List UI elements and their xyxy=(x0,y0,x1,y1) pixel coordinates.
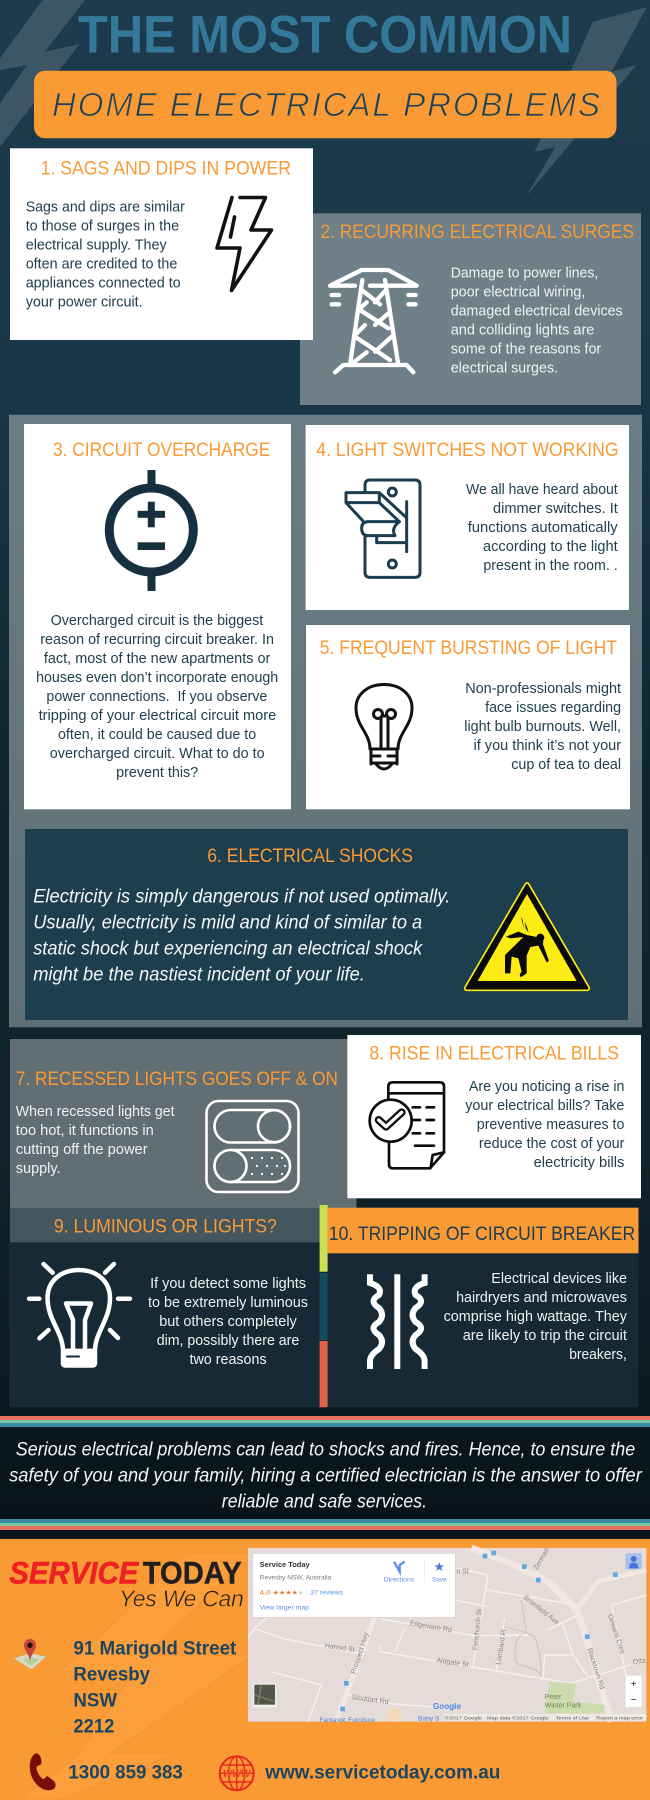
map labels: Blacktown Rd xyxy=(585,1647,605,1690)
text: overcharge description: houses even don’t incorporate enough xyxy=(36,669,278,686)
text: bills description: preventive measures to xyxy=(477,1116,624,1133)
text: switches description: according to the light xyxy=(483,538,619,555)
website: www.servicetoday.com.au xyxy=(264,1762,500,1783)
map labels: Aldgate St xyxy=(436,1657,469,1669)
text: bills description xyxy=(465,1078,624,1171)
text: overcharge description: Overcharged circuit is the biggest xyxy=(51,612,264,629)
text: bursting description: cup of tea to deal xyxy=(511,756,621,773)
map labels: Zermatt xyxy=(533,1547,551,1571)
heading 9: 9. LUMINOUS OR LIGHTS? xyxy=(54,1216,277,1238)
icon: checked bill xyxy=(370,1082,444,1168)
map embed xyxy=(248,1547,646,1724)
text: switches description: present in the room. . xyxy=(483,557,618,574)
map labels: Harrod St xyxy=(324,1643,355,1654)
text: surges description: damaged electrical devices xyxy=(451,302,623,319)
icon: lightning bolt xyxy=(217,198,272,290)
heading 5: 5. FREQUENT BURSTING OF LIGHT xyxy=(320,637,617,659)
text: luminous description: but others completely xyxy=(159,1313,297,1330)
background lightning bolts xyxy=(0,0,647,196)
map labels: Lombard Pl xyxy=(495,1629,508,1665)
text: overcharge description: power connections. If you observe xyxy=(46,688,267,705)
panel: 4 light switches xyxy=(306,425,629,610)
panel: 9 and 10 dark area xyxy=(9,1208,638,1407)
text: tripping description: comprise high wattage. They xyxy=(444,1308,627,1325)
text: sags description: to those of surges in the xyxy=(26,217,179,234)
map info card: Revesby NSW, Australia xyxy=(260,1575,332,1582)
text: surges description: poor electrical wiring, xyxy=(451,283,585,300)
map info card: Save xyxy=(432,1576,447,1583)
map attribution: Report a map error xyxy=(596,1715,643,1721)
icon: glowing bulb xyxy=(29,1264,130,1366)
map labels: Stoddart Rd xyxy=(351,1694,389,1706)
icon: transformer coils xyxy=(370,1274,425,1369)
icon: www globe: WWW xyxy=(223,1768,252,1780)
text: overcharge description: often, it could be caused due to xyxy=(58,726,256,743)
text: sags description: Sags and dips are similar xyxy=(26,198,185,215)
map labels: Edgeware Rd xyxy=(409,1620,452,1634)
text: overcharge description: reason of recurring circuit breaker. In xyxy=(40,631,274,648)
zoom control xyxy=(626,1676,642,1707)
text: recessed description: supply. xyxy=(16,1160,61,1177)
text: switches description: dimmer switches. It xyxy=(493,500,619,517)
map info card: ★ xyxy=(298,1589,303,1596)
panel: 7 recessed lights xyxy=(10,1039,356,1208)
text: bursting description: if you think it’s not your xyxy=(474,737,621,754)
map labels: n St xyxy=(456,1568,469,1575)
map attribution: ©2017 Google - Map data ©2017 Google xyxy=(445,1714,549,1721)
map info card xyxy=(253,1553,455,1617)
map info card: ★ xyxy=(434,1560,445,1574)
heading 3: 3. CIRCUIT OVERCHARGE xyxy=(53,439,270,461)
text: luminous description: If you detect some lights xyxy=(150,1275,306,1292)
address xyxy=(73,1638,237,1737)
text: sags description: appliances connected to xyxy=(26,274,181,291)
address: 2212 xyxy=(73,1716,114,1737)
text: tripping description xyxy=(444,1270,628,1363)
map info card: ★★★★ xyxy=(273,1589,298,1596)
text: overcharge description: fact, most of the new apartments or xyxy=(44,650,270,667)
conclusion band xyxy=(0,1416,650,1530)
text: conclusion xyxy=(9,1439,643,1513)
text: luminous description: dim, possibly there are xyxy=(157,1332,299,1349)
text: bills description: electricity bills xyxy=(534,1154,624,1171)
map labels: Peter xyxy=(545,1694,562,1701)
text: shocks description: might be the nastiest incident of your life. xyxy=(33,964,365,986)
panel: 5 bursting of light xyxy=(306,625,630,809)
map park xyxy=(545,1682,605,1713)
text: recessed description: too hot, it functions in xyxy=(16,1122,154,1139)
text: overcharge description xyxy=(36,612,278,781)
text: switches description xyxy=(466,481,619,574)
text: shocks description: Electricity is simply dangerous if not used optimally. xyxy=(33,886,450,908)
icon: transmission tower xyxy=(330,270,417,372)
panel: footer contact xyxy=(0,1539,650,1800)
phone number: 1300 859 383 xyxy=(68,1762,183,1783)
icon: toggle switches xyxy=(206,1101,298,1192)
icon: www globe xyxy=(220,1756,254,1790)
panel: 3 circuit overcharge xyxy=(24,424,291,809)
text: tripping description: breakers, xyxy=(569,1346,627,1363)
address: 91 Marigold Street xyxy=(73,1638,237,1659)
map info card: Directions xyxy=(384,1576,414,1583)
address: Revesby xyxy=(73,1664,150,1685)
text: recessed description xyxy=(16,1103,175,1177)
panel: grey group 3 to 6 xyxy=(9,415,642,1027)
icon: electric shock warning sign xyxy=(467,885,587,988)
text: tripping description: are likely to trip the circuit xyxy=(463,1327,628,1344)
satellite thumbnail xyxy=(253,1683,276,1707)
text: overcharge description: tripping of your electrical circuit more xyxy=(39,707,276,724)
panel: 2 recurring electrical surges xyxy=(300,213,641,405)
text: sags description: often are credited to the xyxy=(26,255,177,272)
text: shocks description: static shock but experiencing an electrical shock xyxy=(33,938,423,960)
subtitle banner: HOME ELECTRICAL PROBLEMS xyxy=(52,86,600,123)
text: surges description: electrical surges. xyxy=(451,359,558,376)
text: switches description: functions automatically xyxy=(468,519,618,536)
map info card: Service Today xyxy=(260,1562,310,1569)
heading 4: 4. LIGHT SWITCHES NOT WORKING xyxy=(316,439,619,461)
panel: 6 electrical shocks xyxy=(25,829,628,1020)
map info card: 37 reviews xyxy=(310,1589,343,1596)
logo: Yes We Can xyxy=(119,1586,244,1612)
street view button xyxy=(626,1553,642,1569)
text: shocks description xyxy=(33,886,450,986)
text: bills description: reduce the cost of your xyxy=(479,1135,624,1152)
icon: plus minus circle xyxy=(109,470,193,591)
map labels: Orleans Cres xyxy=(606,1613,626,1655)
text: switches description: We all have heard about xyxy=(466,481,618,498)
map info card: 4.0 xyxy=(260,1590,271,1597)
text: bills description: Are you noticing a rise in xyxy=(469,1078,624,1095)
map labels: Winter Park xyxy=(545,1702,582,1709)
map attribution xyxy=(445,1714,646,1721)
colored vertical strip xyxy=(320,1205,328,1407)
text: luminous description xyxy=(148,1275,308,1368)
text: luminous description: to be extremely luminous xyxy=(148,1294,308,1311)
zoom control: + xyxy=(631,1679,637,1689)
logo xyxy=(9,1554,244,1612)
panel: 8 rise in bills xyxy=(347,1035,641,1198)
map info card: View larger map xyxy=(260,1605,310,1612)
text: sags description xyxy=(26,198,185,310)
text: sags description: your power circuit. xyxy=(26,293,143,310)
map labels: Prospect Hwy xyxy=(351,1631,371,1675)
map labels: Otta xyxy=(632,1658,646,1666)
map labels: Bromfield Ave xyxy=(522,1594,560,1626)
subtitle banner xyxy=(34,71,616,138)
logo: TODAY xyxy=(143,1554,242,1590)
map labels: Fenchurch St xyxy=(472,1608,484,1651)
icon: light bulb xyxy=(356,684,412,769)
text: tripping description: Electrical devices like xyxy=(491,1270,627,1287)
text: overcharge description: overcharged circuit. What to do to xyxy=(50,745,265,762)
text: bills description: your electrical bills? Take xyxy=(465,1097,624,1114)
map labels: Fantastic Furniture xyxy=(319,1717,375,1724)
text: bursting description xyxy=(464,680,622,773)
text: conclusion: reliable and safe services. xyxy=(222,1491,427,1513)
text: shocks description: Usually, electricity is mild and kind of similar to a xyxy=(33,912,422,934)
text: surges description: Damage to power lines, xyxy=(451,264,598,281)
text: bursting description: Non-professionals might xyxy=(465,680,622,697)
text: tripping description: hairdryers and microwaves xyxy=(456,1289,627,1306)
map bus stops xyxy=(340,1551,618,1711)
text: surges description xyxy=(451,264,623,376)
heading 7: 7. RECESSED LIGHTS GOES OFF & ON xyxy=(16,1068,338,1090)
text: overcharge description: prevent this? xyxy=(116,764,198,781)
icon: phone xyxy=(30,1753,56,1790)
text: surges description: some of the reasons for xyxy=(451,340,601,357)
icon: location pin on map xyxy=(14,1639,46,1669)
text: surges description: and colliding lights are xyxy=(451,321,594,338)
panel: 9 luminous or lights xyxy=(10,1208,320,1368)
panel: 1 sags and dips xyxy=(10,148,313,340)
logo: SERVICE xyxy=(9,1554,139,1590)
map labels xyxy=(319,1547,646,1724)
heading 8: 8. RISE IN ELECTRICAL BILLS xyxy=(369,1042,619,1064)
text: recessed description: cutting off the power xyxy=(16,1141,148,1158)
text: bursting description: light bulb burnouts. Well, xyxy=(464,718,621,735)
text: luminous description: two reasons xyxy=(190,1351,267,1368)
icon: light switch xyxy=(346,480,420,577)
zoom control: − xyxy=(631,1695,637,1705)
title: THE MOST COMMON xyxy=(78,6,572,65)
panel: 10 tripping of circuit breaker xyxy=(328,1208,638,1369)
text: recessed description: When recessed lights get xyxy=(16,1103,175,1120)
heading 1: 1. SAGS AND DIPS IN POWER xyxy=(41,157,291,179)
map labels: Baby S xyxy=(418,1716,440,1723)
text: bursting description: face issues regarding xyxy=(485,699,621,716)
heading 6: 6. ELECTRICAL SHOCKS xyxy=(207,845,413,867)
google logo: Google xyxy=(433,1701,461,1711)
address: NSW xyxy=(73,1690,117,1711)
map roads xyxy=(248,1548,646,1722)
map attribution: Terms of Use xyxy=(556,1715,589,1721)
text: sags description: electrical supply. They xyxy=(26,236,167,253)
